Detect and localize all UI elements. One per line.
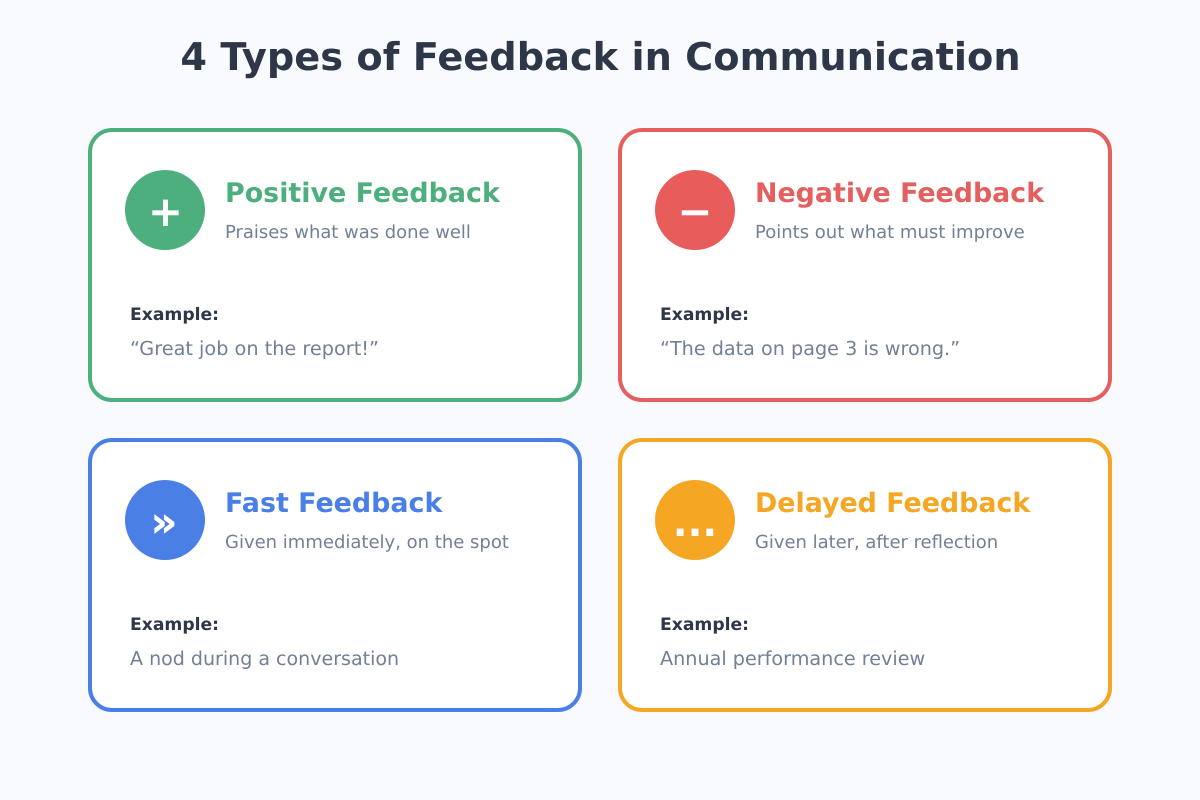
example text: positive feedback: “Great job on the report!”	[130, 337, 379, 360]
icon: plus	[125, 170, 205, 250]
panel: fast feedback	[90, 440, 580, 710]
description: negative feedback: Points out what must improve	[755, 222, 1025, 243]
panel: positive feedback	[90, 130, 580, 400]
heading: delayed feedback: Delayed Feedback	[755, 488, 1031, 519]
example text: fast feedback: A nod during a conversation	[130, 648, 399, 670]
example text: delayed feedback: Annual performance review	[660, 647, 925, 670]
icon: minus	[655, 170, 735, 250]
description: positive feedback: Praises what was done well	[225, 222, 471, 243]
panel: negative feedback	[620, 130, 1110, 400]
example label: positive feedback: Example:	[130, 305, 219, 325]
icon: dots	[655, 480, 735, 560]
icon: minus: −	[677, 187, 713, 236]
icon: double chevron	[125, 480, 205, 560]
heading: positive feedback: Positive Feedback	[225, 178, 501, 209]
icon: plus: +	[148, 187, 183, 236]
panel: delayed feedback	[620, 440, 1110, 710]
example label: fast feedback: Example:	[130, 615, 219, 635]
heading: negative feedback: Negative Feedback	[755, 178, 1045, 209]
icon: dots: ...	[673, 501, 717, 546]
icon: double chevron: »	[151, 498, 177, 546]
example label: delayed feedback: Example:	[660, 615, 749, 635]
heading: fast feedback: Fast Feedback	[225, 488, 443, 519]
example label: negative feedback: Example:	[660, 305, 749, 325]
title: 4 Types of Feedback in Communication	[180, 35, 1021, 80]
description: delayed feedback: Given later, after reflection	[755, 532, 998, 553]
description: fast feedback: Given immediately, on the spot	[225, 532, 509, 553]
example text: negative feedback: “The data on page 3 is wrong.”	[660, 337, 960, 360]
